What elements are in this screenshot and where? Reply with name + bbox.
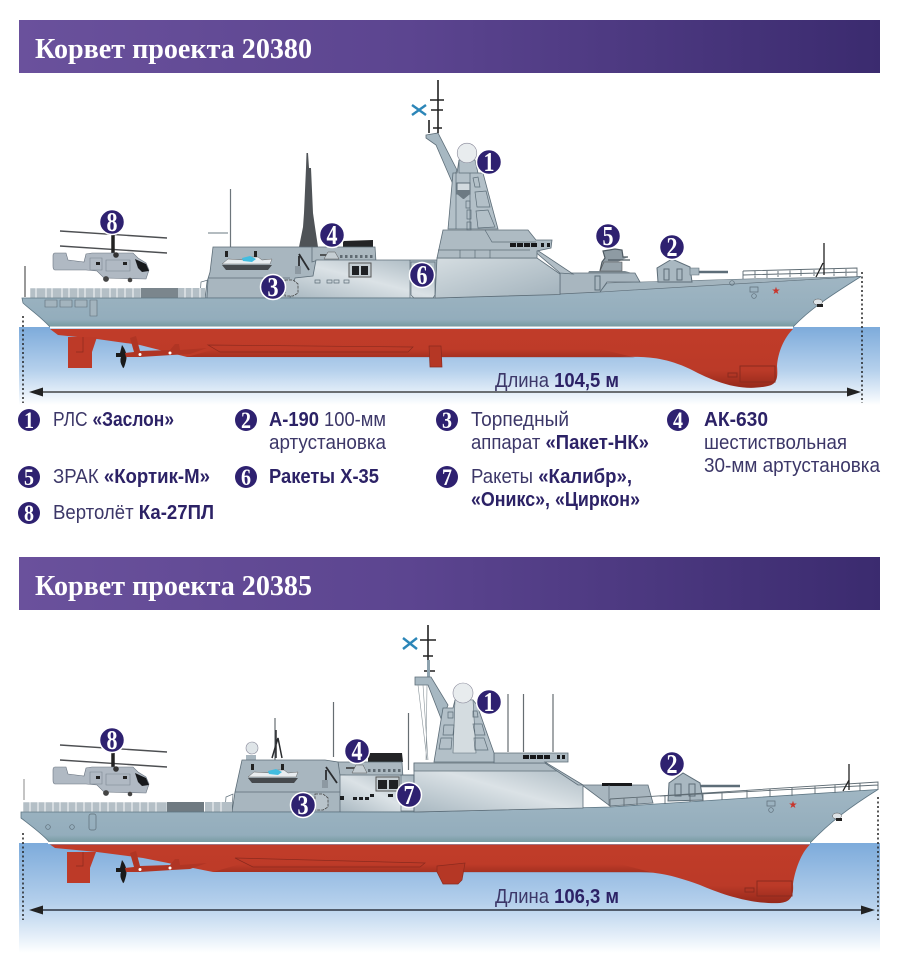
legend item 7: Ракеты «Калибр», [471,466,632,488]
callout numbers 20380: 1 [484,147,494,177]
davit 20380 [299,254,309,270]
red underwater hull 20380 [50,329,793,388]
legend item 3: аппарат «Пакет-НК» [471,432,649,454]
legend item 4: 30-мм артустановка [704,455,881,477]
radar tower 20385 [415,625,494,762]
legend item 3 [436,408,649,454]
callout numbers 20380: 3 [268,272,278,302]
callout numbers 20385: 1 [484,687,494,717]
hull keel details 20385 [235,858,425,867]
bow railing 20380 [743,268,857,279]
hangar windows 20380 [349,263,371,277]
Kortik-M system 20380 [600,249,630,271]
length dimension 20385 [23,797,878,920]
waterline stripe 20380 [50,326,793,328]
torpedo launcher 20380 [285,280,298,296]
legend item 8: 8 [24,501,34,526]
length dimension 20380: Длина 104,5 м [495,370,619,392]
forward superstructure 20380 [435,230,640,298]
legend item 7 [436,465,640,511]
rudder 20385 [67,852,96,883]
ship: corvette 20380: ★ [772,286,781,297]
red underwater hull 20385 [50,844,810,903]
legend item 3: Торпедный [471,409,569,431]
legend item 7: «Оникс», «Циркон» [471,489,640,511]
aft antenna and mast 20380 [230,189,232,247]
hull keel details 20380 [208,345,413,352]
antennas 20385 [275,694,553,770]
hull bottom shading 20380 [187,349,635,358]
helicopter 20380 [53,231,167,282]
helicopter 20385 [53,745,167,796]
callout numbers 20385: 3 [298,790,308,820]
callout numbers 20385 [106,687,678,820]
hull markings 20385 [767,801,775,806]
legend item 7: 7 [442,465,452,490]
hull markings 20380 [750,287,758,292]
legend item 6: Ракеты Х-35 [269,466,379,488]
A-190 gun 20385 [668,773,740,801]
callout numbers 20385: 4 [352,736,362,766]
legend item 4: шестиствольная [704,432,847,454]
callout numbers 20380: 4 [326,220,338,250]
callout numbers 20380: 5 [602,221,614,251]
callout numbers 20380 [106,147,678,302]
boat 20380 [222,256,272,270]
ship: corvette 20385 [21,625,878,903]
callout numbers 20380: 8 [106,207,118,237]
forward superstructure 20385 [414,753,653,812]
rudder 20380 [68,337,97,368]
bow railing 20385 [610,782,878,807]
central superstructure 20385 [340,775,414,812]
callouts 20380 [100,150,684,300]
helideck railing 20385 [23,779,232,812]
hull bottom shading 20385 [213,864,652,872]
upper deck structure 20385 [368,753,403,762]
ship: corvette 20380 [22,80,861,388]
boat 20385 [248,769,298,783]
callout numbers 20380: 2 [666,232,678,262]
main mast 20380 [299,153,318,247]
callout numbers 20385: 7 [404,780,414,810]
callout numbers 20385: 8 [106,725,118,755]
davit 20385 [326,767,337,784]
mast flag 20380 [412,105,426,115]
aft superstructure 20380 [205,247,318,298]
legend item 8: Вертолёт Ка-27ПЛ [53,502,214,524]
length dimension 20385: Длина 106,3 м [495,886,619,908]
torpedo launcher 20385 [315,794,328,810]
waterline stripe 20385 [48,842,810,844]
legend item 1: РЛС «Заслон» [53,409,174,431]
hull 20380 [22,276,861,327]
legend item 1: 1 [24,408,34,433]
legend item 5: 5 [24,465,34,490]
legend item 2: А-190 100-мм [269,409,386,431]
aft mast 20385 [272,730,282,758]
legend [18,408,881,526]
legend item 4: АК-630 [704,409,768,431]
legend item 4: 4 [673,408,683,433]
legend item 6: 6 [241,465,251,490]
satellite dome 20385 [246,755,256,760]
header: project 20380 [19,20,880,73]
legend item 2: 2 [241,408,251,433]
callout numbers 20385: 2 [666,749,678,779]
AK-630 gun 20385 [346,765,400,773]
legend item 3: 3 [442,408,452,433]
missile launcher 20385 [401,775,414,811]
helideck railing 20380 [25,266,205,298]
legend item 6 [235,465,379,490]
AK-630 gun 20380 [320,252,372,259]
bow pole and anchor 20380 [816,243,824,277]
aft superstructure 20385 [232,760,345,812]
hull 20385 [21,790,878,843]
A-190 gun 20380 [657,259,728,282]
missile launcher 20380 [411,262,435,298]
water band 20380 [19,327,880,405]
ship: corvette 20385: ★ [789,800,798,811]
callouts 20385 [100,690,684,818]
header: project 20385 [19,557,880,610]
callout numbers 20380: 6 [416,260,428,290]
radar tower 20380 [426,80,498,230]
header: project 20385: Корвет проекта 20385 [35,571,312,602]
hull details 20380 [45,276,861,316]
propeller and shaft 20385 [116,851,207,883]
legend item 5 [18,465,210,490]
legend item 5: ЗРАК «Кортик-М» [53,466,210,488]
header: project 20380: Корвет проекта 20380 [35,34,312,65]
legend item 2: артустановка [269,432,387,454]
mast flag 20385 [403,638,417,649]
propeller and shaft 20380 [116,336,207,368]
legend item 1 [18,408,174,433]
bow pole and anchor 20385 [843,764,849,791]
upper deck structure 20380 [343,240,373,247]
hangar windows 20385 [376,777,399,791]
central superstructure 20380 [290,260,437,298]
legend item 2 [235,408,387,454]
water band 20385 [19,843,880,953]
length dimension 20380 [23,272,862,403]
legend item 4 [667,408,881,477]
